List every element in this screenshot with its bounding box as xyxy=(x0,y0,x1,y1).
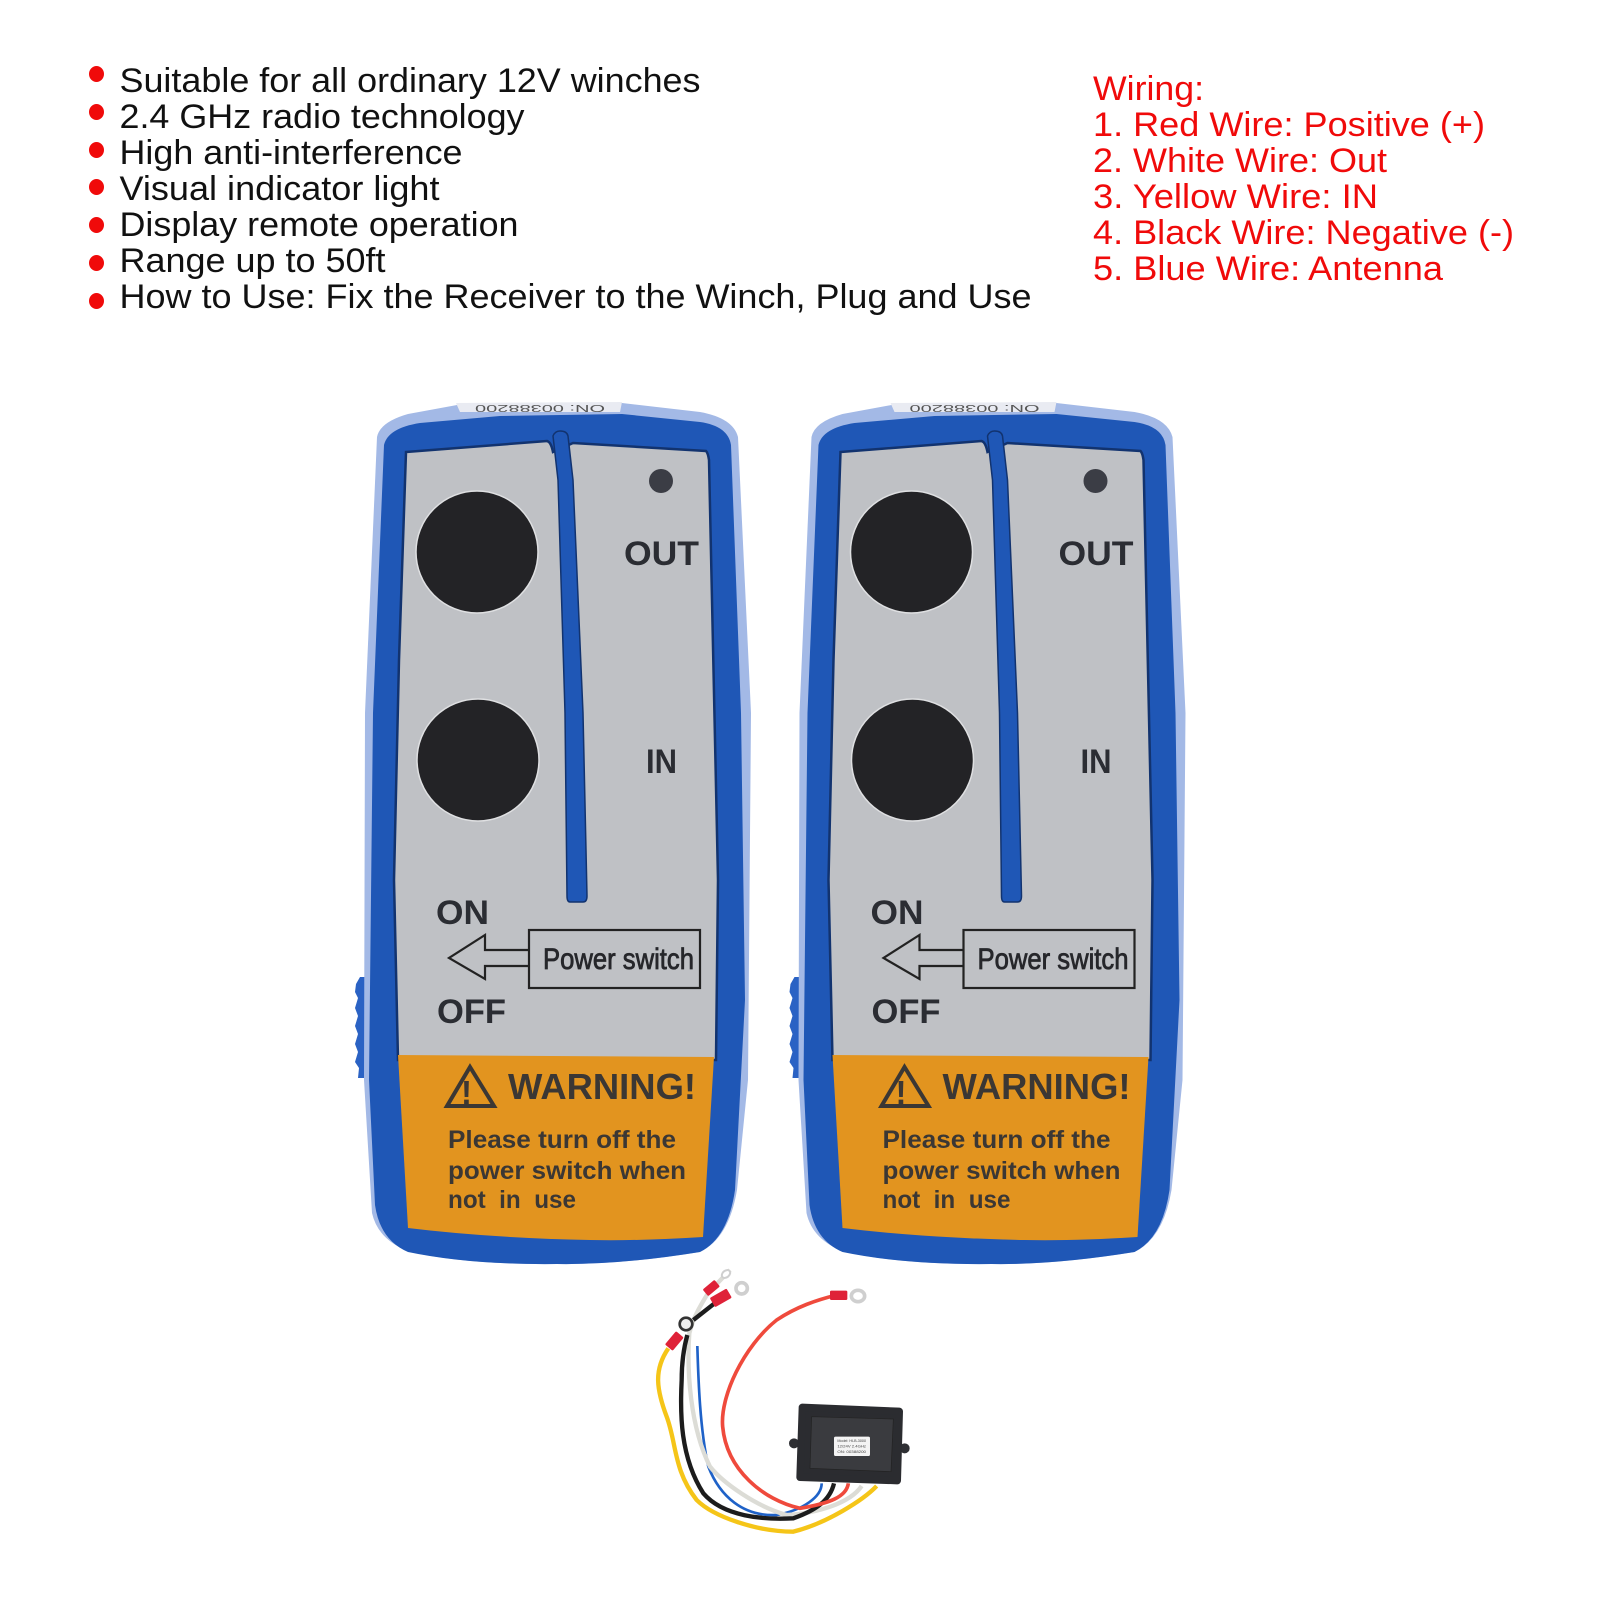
crimp terminal black wire xyxy=(710,1288,732,1307)
power switch box xyxy=(964,930,1134,988)
crimp terminal red wire xyxy=(830,1291,847,1300)
bullet 7 xyxy=(89,293,104,309)
wiring item 3: 3. Yellow Wire: IN xyxy=(1093,178,1378,216)
warning triangle xyxy=(447,1067,494,1106)
receiver label voltage: 12/24V 2.4GHz xyxy=(837,1444,866,1449)
warning line 1: Please turn off the xyxy=(882,1126,1111,1154)
ring lug black wire xyxy=(736,1283,747,1294)
label IN: IN xyxy=(1080,743,1112,781)
receiver mounting tab left xyxy=(789,1438,799,1448)
receiver case xyxy=(800,1407,899,1481)
receiver with wires xyxy=(658,1268,910,1532)
label OFF: OFF xyxy=(437,993,506,1031)
warning panel xyxy=(832,1055,1148,1240)
top serial label xyxy=(890,402,1056,412)
power switch text: Power switch xyxy=(978,943,1128,976)
black wire xyxy=(681,1302,834,1519)
warning line 2: power switch when xyxy=(882,1157,1120,1185)
feature 5: Display remote operation xyxy=(120,206,518,244)
remote control left xyxy=(355,402,751,1264)
label ON: ON xyxy=(436,894,489,932)
ring terminal black xyxy=(680,1318,692,1330)
button in xyxy=(417,699,539,821)
feature list xyxy=(89,62,1032,316)
ring lug red wire xyxy=(851,1290,865,1302)
bullet 1 xyxy=(89,66,104,82)
wiring legend xyxy=(1093,70,1514,288)
bullet 2 xyxy=(89,104,104,120)
label ON: ON xyxy=(870,894,924,932)
body dark blue frame xyxy=(369,414,745,1264)
silver faceplate xyxy=(394,441,718,1060)
blue wire xyxy=(697,1346,822,1515)
bullet 5 xyxy=(89,217,104,233)
remote control right xyxy=(790,402,1186,1264)
bullet 3 xyxy=(89,142,104,158)
arrow xyxy=(449,935,529,979)
warning line 2: power switch when xyxy=(448,1157,686,1185)
remote body xyxy=(798,403,1186,1264)
warning panel xyxy=(398,1055,714,1240)
feature 2: 2.4 GHz radio technology xyxy=(120,98,524,136)
receiver label serial: ON: 00388200 xyxy=(837,1449,867,1454)
bullet 6 xyxy=(89,255,104,271)
body dark blue frame xyxy=(804,414,1180,1264)
wiring item 4: 4. Black Wire: Negative (-) xyxy=(1093,214,1514,252)
top serial label xyxy=(456,402,622,412)
receiver label xyxy=(834,1437,870,1456)
feature 3: High anti-interference xyxy=(120,134,462,172)
warning exclamation: ! xyxy=(461,1074,472,1111)
receiver mounting tab right xyxy=(900,1443,910,1453)
serial text: ON: 00388200 xyxy=(474,402,605,413)
wiring item 1: 1. Red Wire: Positive (+) xyxy=(1093,106,1485,144)
warning line 3: not in use xyxy=(448,1186,576,1214)
button out xyxy=(416,491,538,613)
yellow wire xyxy=(658,1348,877,1532)
remote body xyxy=(364,403,751,1264)
red wire xyxy=(722,1295,848,1508)
ring lug white wire xyxy=(720,1268,732,1280)
blue divider slot xyxy=(988,431,1022,902)
label IN: IN xyxy=(646,743,677,781)
label OUT: OUT xyxy=(624,535,699,573)
white wire xyxy=(689,1270,862,1515)
receiver label text: Model: HLB-3000 xyxy=(837,1438,867,1443)
crimp terminal yellow wire xyxy=(665,1331,684,1351)
feature 1: Suitable for all ordinary 12V winches xyxy=(120,62,700,100)
label OFF: OFF xyxy=(872,993,940,1031)
power switch box xyxy=(529,930,700,988)
warning line 3: not in use xyxy=(882,1186,1011,1214)
warning triangle xyxy=(882,1067,928,1106)
feature 4: Visual indicator light xyxy=(120,170,440,208)
crimp terminal white wire xyxy=(703,1280,720,1296)
indicator light xyxy=(1084,469,1108,493)
warning exclamation: ! xyxy=(896,1074,906,1111)
wiring item 5: 5. Blue Wire: Antenna xyxy=(1093,250,1443,288)
receiver lid xyxy=(810,1417,893,1472)
silver faceplate xyxy=(828,441,1152,1060)
power switch text: Power switch xyxy=(543,943,694,976)
side power switch xyxy=(790,977,804,1078)
label OUT: OUT xyxy=(1058,535,1134,573)
serial text: ON: 00388200 xyxy=(909,402,1040,413)
wiring item 2: 2. White Wire: Out xyxy=(1093,142,1388,180)
indicator light xyxy=(649,469,673,493)
feature 6: Range up to 50ft xyxy=(120,242,386,280)
side power switch xyxy=(355,977,370,1078)
warning title: WARNING! xyxy=(508,1066,696,1107)
button in xyxy=(852,699,974,821)
button out xyxy=(850,491,972,613)
wiring heading: Wiring: xyxy=(1093,70,1204,108)
warning title: WARNING! xyxy=(942,1066,1130,1107)
blue divider slot xyxy=(553,431,587,902)
arrow xyxy=(884,935,964,979)
warning line 1: Please turn off the xyxy=(448,1126,676,1154)
feature 7: How to Use: Fix the Receiver to the Winch, Plug and Use xyxy=(120,278,1032,316)
bullet 4 xyxy=(89,179,104,195)
